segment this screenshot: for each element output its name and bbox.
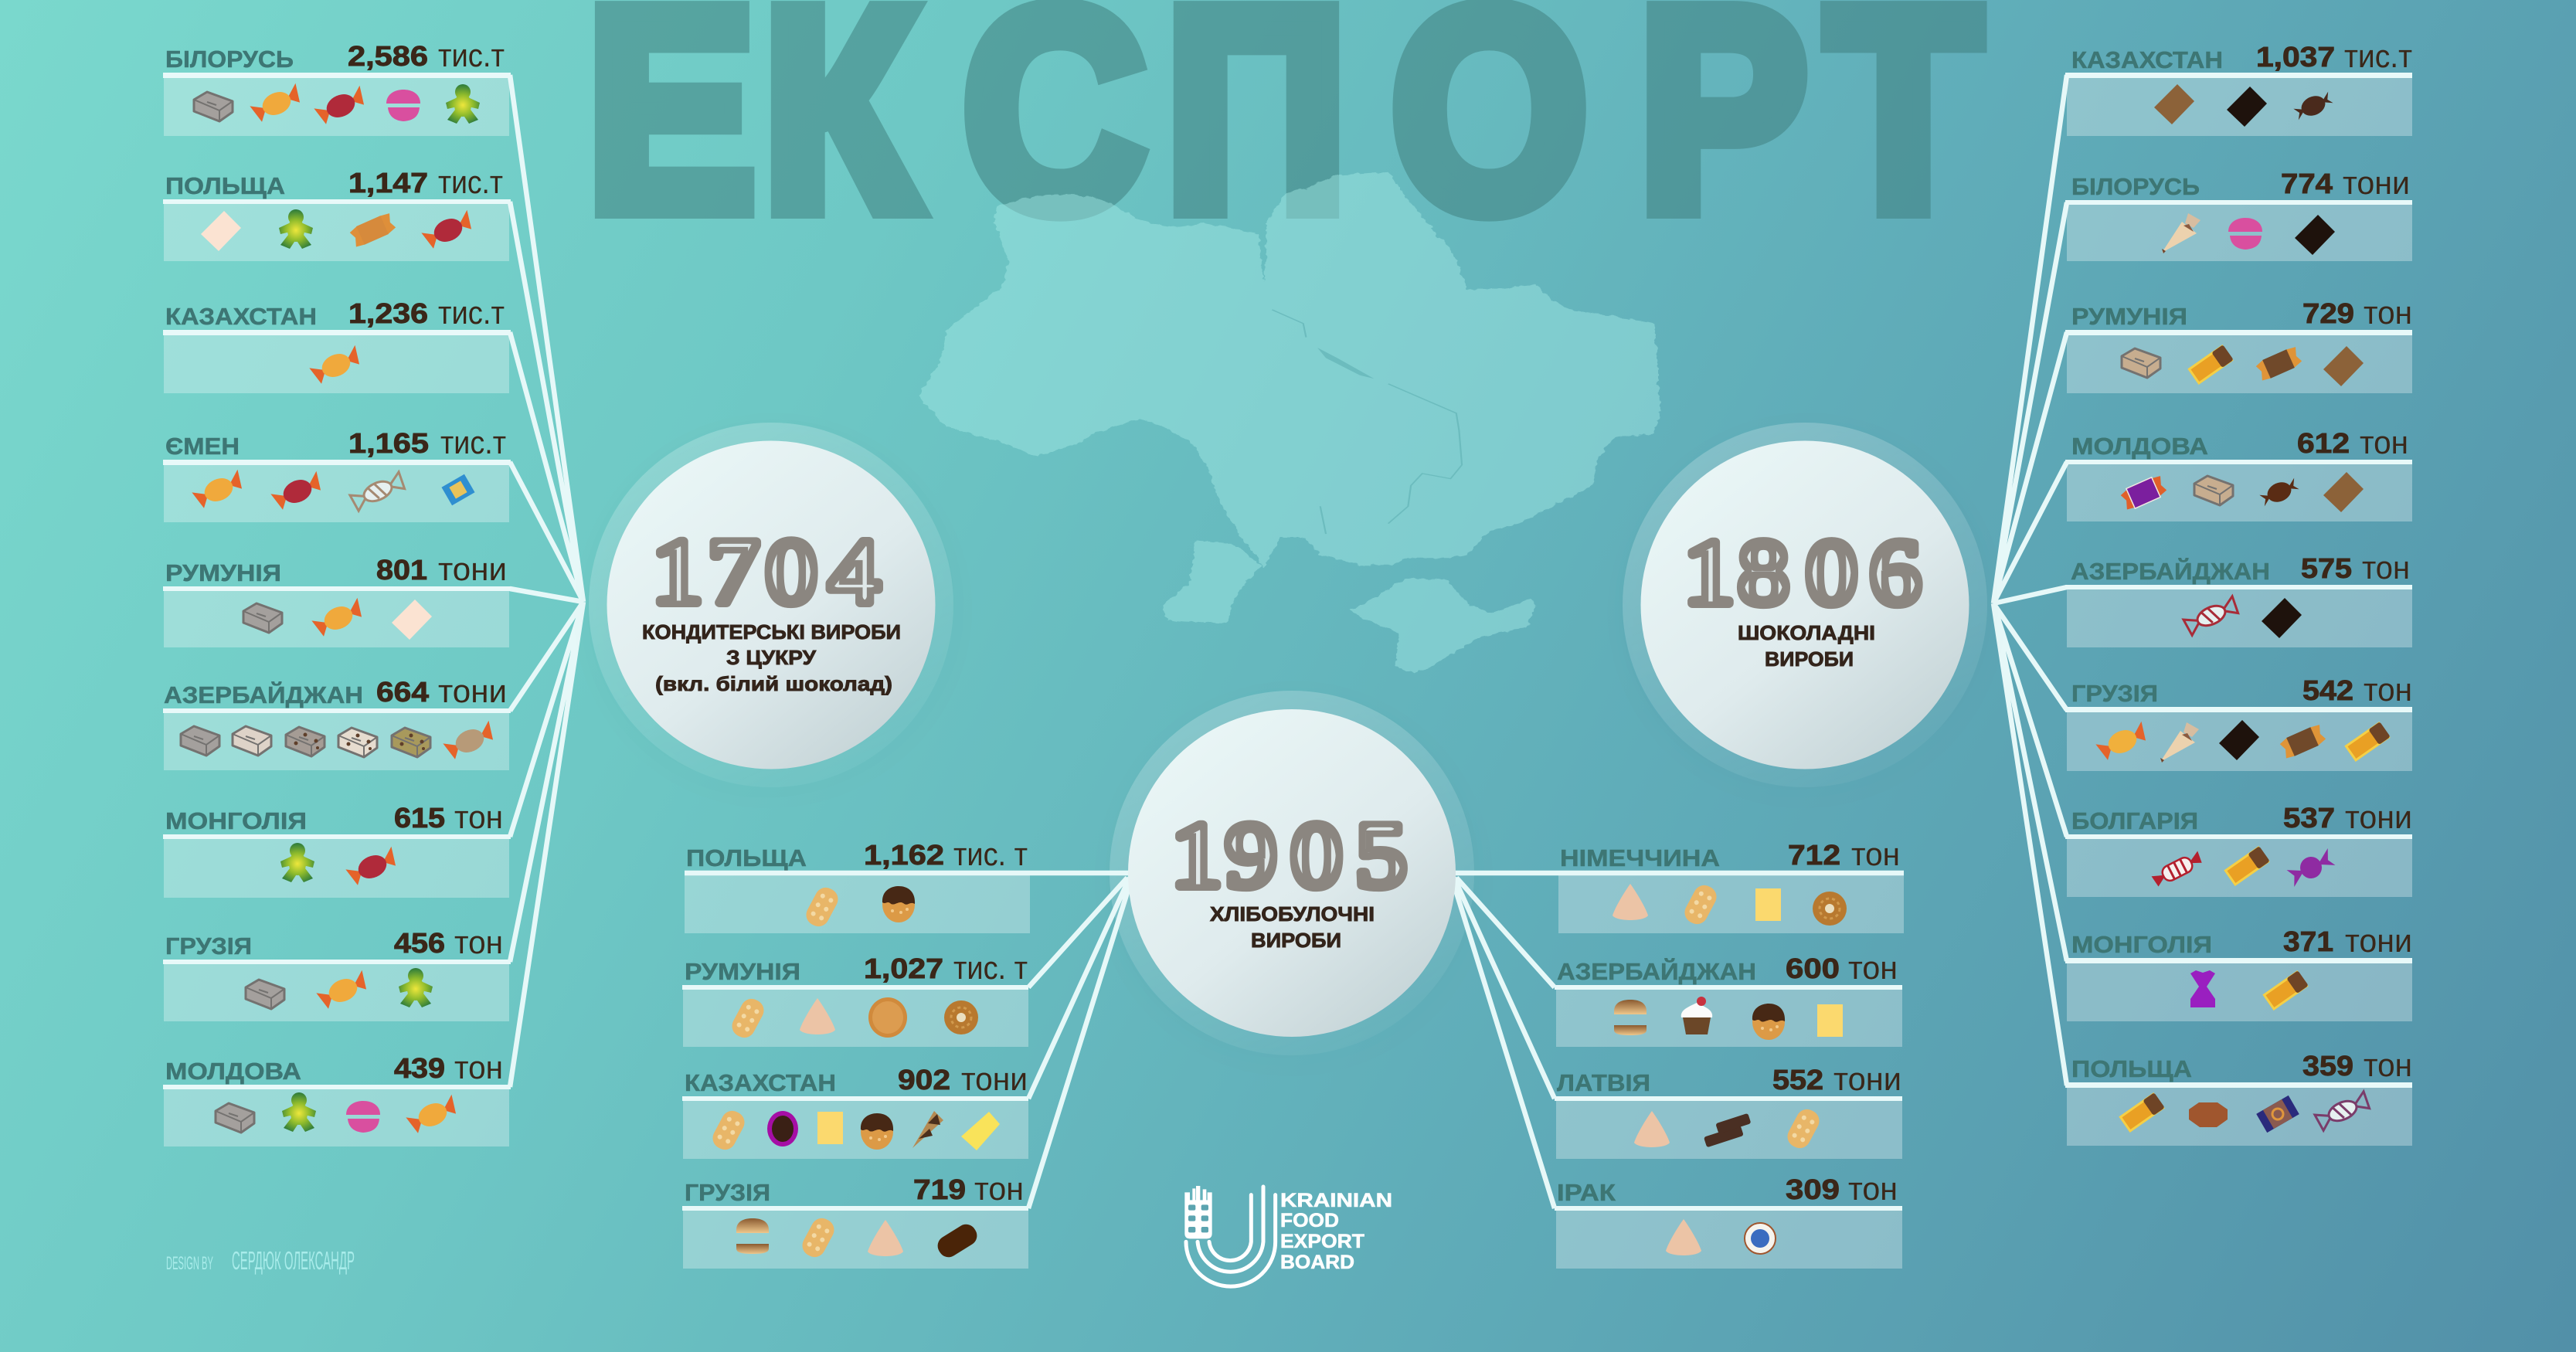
icon: halva <box>246 980 284 1009</box>
icon: striped candy <box>2314 1092 2371 1131</box>
country: МОЛДОВА <box>2071 433 2208 460</box>
row: Білорусь, chocolate <box>2065 165 2412 261</box>
icon: milk chocolate <box>2154 84 2194 124</box>
icon: cone <box>800 998 835 1034</box>
row: Ємен, confectionery <box>163 424 511 522</box>
value: 1,147 <box>348 167 428 199</box>
value: 552 <box>1772 1064 1823 1096</box>
value: 729 <box>2302 297 2354 329</box>
country: БОЛГАРІЯ <box>2071 807 2198 834</box>
label <box>642 620 901 695</box>
icon: bar <box>2120 1092 2165 1132</box>
icon: white candy <box>201 211 241 251</box>
icon: yellow cake <box>1755 888 1781 921</box>
label <box>1738 621 1875 671</box>
icon: octagon chocolate <box>2189 1102 2228 1127</box>
country: ГРУЗІЯ <box>165 932 252 960</box>
panel <box>683 985 1028 1047</box>
value: 359 <box>2302 1050 2353 1082</box>
unit: тон <box>1851 836 1900 872</box>
logo mark <box>1184 1186 1276 1286</box>
icon: roll <box>799 1214 838 1261</box>
icon: halva <box>194 92 233 121</box>
icon: choc halva <box>2122 348 2160 378</box>
icon: red candy <box>420 210 476 250</box>
icon: bar <box>2264 970 2309 1010</box>
value: 1,236 <box>348 297 428 329</box>
logo: Ukrainian Food Export Board <box>1184 1186 1392 1286</box>
value: 1,165 <box>348 427 429 459</box>
value: 2,586 <box>348 40 428 72</box>
icon: vanilla halva <box>233 726 271 756</box>
icon: donut <box>944 1000 978 1034</box>
icon: chocolate candy <box>2292 90 2335 122</box>
icon: caramel <box>2255 345 2303 382</box>
icon: toffee <box>348 212 397 248</box>
circle: chocolate <box>1623 423 1987 787</box>
icon: yellow wafer <box>961 1112 1000 1150</box>
unit: тони <box>438 673 507 709</box>
icon: yellow cake <box>817 1112 843 1144</box>
icon: piping bag <box>2162 213 2200 253</box>
unit: тис.т <box>2344 38 2412 74</box>
unit: тон <box>974 1170 1024 1207</box>
unit: тис.т <box>438 294 505 331</box>
unit: тон <box>2362 549 2410 586</box>
value: 600 <box>1786 953 1840 984</box>
icon: cone <box>1613 884 1648 920</box>
row: Азербайджан, chocolate <box>2065 549 2412 647</box>
icon: bar <box>2225 846 2270 885</box>
icon: striped candy <box>2150 851 2204 888</box>
country: НІМЕЧЧИНА <box>1560 844 1720 871</box>
code 1905: 1905 <box>1171 804 1406 907</box>
icon: orange candy <box>2095 722 2150 762</box>
icon: macaron <box>386 90 420 121</box>
icon: purple donut <box>767 1111 798 1146</box>
panel <box>2067 958 2412 1021</box>
country: БІЛОРУСЬ <box>165 46 294 73</box>
icon: burger <box>736 1218 769 1254</box>
icon: halva <box>243 603 282 633</box>
row: Польща, chocolate <box>2065 1047 2412 1146</box>
panel <box>164 460 509 522</box>
text: СЕРДЮК ОЛЕКСАНДР <box>232 1246 355 1275</box>
unit: тон <box>1848 1170 1898 1207</box>
country: ГРУЗІЯ <box>2071 680 2158 707</box>
label: ВИРОБИ <box>1251 929 1341 952</box>
row: Монголія, confectionery <box>163 799 511 898</box>
icon: wafer <box>912 1111 943 1148</box>
icon: white candy <box>392 600 432 640</box>
unit: тон <box>2364 1047 2412 1083</box>
panel <box>164 330 509 393</box>
unit: тон <box>2364 294 2412 331</box>
icon: gummy <box>446 84 480 124</box>
unit: тони <box>1833 1061 1901 1097</box>
country: ПОЛЬЩА <box>2071 1055 2192 1082</box>
icon: bar <box>2346 722 2391 761</box>
unit: тис.т <box>438 37 505 73</box>
country: ЄМЕН <box>165 433 240 460</box>
icon: gummy <box>282 1092 316 1132</box>
icon: striped candy <box>349 472 406 511</box>
connectors: chocolate <box>1993 75 2067 1085</box>
icon: burger <box>1614 1000 1647 1035</box>
country: МОНГОЛІЯ <box>2071 931 2212 958</box>
row: Монголія, chocolate <box>2065 922 2412 1021</box>
value: 309 <box>1786 1174 1840 1205</box>
icon: red candy <box>345 847 400 887</box>
label: (вкл. білий шоколад) <box>655 672 892 695</box>
icon: glazed muffin <box>861 1113 893 1150</box>
unit: тон <box>454 799 503 835</box>
icon: orange candy <box>405 1095 460 1135</box>
icon: halva <box>216 1103 254 1133</box>
icon: dark chocolate <box>2219 720 2259 760</box>
icon: red candy <box>270 471 325 511</box>
icon: choc halva <box>2194 476 2233 505</box>
country: ГРУЗІЯ <box>685 1179 770 1206</box>
designer credit: DESIGN BY <box>166 1253 213 1274</box>
value: 612 <box>2297 427 2350 459</box>
panel <box>2067 460 2412 521</box>
panel <box>164 199 509 261</box>
icon: vanilla nut halva <box>338 728 377 757</box>
label: КОНДИТЕРСЬКІ ВИРОБИ <box>642 620 901 644</box>
icon: orange candy <box>249 83 304 124</box>
country: КАЗАХСТАН <box>685 1069 836 1096</box>
icon: red candy <box>313 86 369 126</box>
country: КАЗАХСТАН <box>2071 46 2223 73</box>
row: Білорусь, confectionery <box>163 37 511 136</box>
panel <box>2067 585 2412 647</box>
row: Грузія, confectionery <box>163 924 511 1021</box>
logo text <box>1280 1190 1392 1273</box>
country: МОНГОЛІЯ <box>165 807 307 834</box>
country: РУМУНІЯ <box>2071 303 2187 330</box>
value: 371 <box>2283 926 2333 957</box>
row: Грузія, bakery <box>682 1170 1028 1269</box>
country: БІЛОРУСЬ <box>2071 173 2200 200</box>
panel <box>1556 1206 1902 1269</box>
icon: purple toffee <box>2119 474 2168 511</box>
unit: тон <box>454 1049 503 1085</box>
value: 542 <box>2302 674 2353 706</box>
panel <box>685 871 1030 933</box>
icon: macaron <box>2228 218 2262 250</box>
country: АЗЕРБАЙДЖАН <box>164 681 363 708</box>
icon: orange candy <box>315 970 371 1011</box>
value: 439 <box>394 1052 445 1084</box>
panel <box>164 834 509 898</box>
icon: waffle <box>868 997 907 1038</box>
unit: тис. т <box>953 836 1028 872</box>
code 1704: 1704 <box>652 521 879 623</box>
icon: dark chocolate <box>2227 87 2267 127</box>
label: ХЛІБОБУЛОЧНІ <box>1210 902 1375 926</box>
panel <box>683 1206 1028 1269</box>
logo text: FOOD <box>1280 1210 1339 1231</box>
icon: nut halva <box>286 727 325 756</box>
panel <box>164 960 509 1021</box>
icon: bar <box>2189 345 2234 384</box>
unit: тис. т <box>953 949 1028 986</box>
icon: roll <box>1784 1106 1823 1152</box>
unit: тис.т <box>440 424 506 460</box>
logo text: KRAINIAN <box>1280 1190 1392 1211</box>
icon: orange candy <box>191 470 246 510</box>
unit: тони <box>961 1061 1028 1097</box>
icon: macaron <box>346 1101 380 1133</box>
row: Румунія, bakery <box>682 949 1028 1047</box>
label: З ЦУКРУ <box>726 646 817 669</box>
icon: dark chocolate <box>2295 215 2335 255</box>
panel <box>2067 1082 2412 1146</box>
row: Азербайджан, confectionery <box>163 673 511 770</box>
logo text: EXPORT <box>1280 1231 1364 1252</box>
panel <box>164 586 509 647</box>
value: 801 <box>376 554 427 586</box>
value: 902 <box>898 1064 950 1096</box>
panel <box>683 1096 1028 1159</box>
row: Казахстан, chocolate <box>2065 38 2412 136</box>
row: Молдова, chocolate <box>2065 424 2412 521</box>
icon: striped candy <box>2183 596 2240 636</box>
label <box>1210 902 1375 952</box>
circle: bakery <box>685 691 1904 1208</box>
country: АЗЕРБАЙДЖАН <box>2071 557 2270 585</box>
value: 1,162 <box>864 839 944 871</box>
icon: eclair <box>934 1221 980 1261</box>
icon: glazed muffin <box>882 886 915 922</box>
icon: chocolate candy <box>2258 476 2301 508</box>
country: ЛАТВІЯ <box>1557 1069 1650 1096</box>
connectors: bakery <box>685 873 1904 1208</box>
icon: gummy <box>280 843 314 882</box>
icon: blue cookie <box>1745 1223 1776 1254</box>
label: ВИРОБИ <box>1765 647 1854 671</box>
row: Молдова, confectionery <box>163 1049 511 1146</box>
panel <box>1558 871 1904 933</box>
icon: cupcake <box>1681 997 1712 1034</box>
icon: milk chocolate <box>2323 472 2364 512</box>
unit: тони <box>438 551 507 587</box>
map of Ukraine <box>918 172 1660 674</box>
row: Німеччина, bakery <box>1558 836 1904 933</box>
code 1806: 1806 <box>1684 521 1921 624</box>
icon: caramel <box>2279 723 2327 759</box>
icon: blue wrapper <box>441 474 475 505</box>
country: ПОЛЬЩА <box>686 844 807 871</box>
row: Болгарія, chocolate <box>2065 799 2412 897</box>
icon: halva <box>181 726 219 756</box>
unit: тис.т <box>438 164 503 200</box>
panel <box>1556 985 1902 1047</box>
value: 664 <box>376 676 429 708</box>
value: 456 <box>394 927 445 959</box>
value: 575 <box>2301 552 2352 584</box>
icon: gummy <box>399 968 433 1007</box>
value: 1,027 <box>864 953 943 984</box>
value: 719 <box>913 1174 966 1205</box>
icon: roll <box>803 884 841 930</box>
row: Казахстан, confectionery <box>163 294 511 393</box>
icon: orange candy <box>311 598 366 638</box>
icon: wrapper <box>2256 1096 2299 1133</box>
icon: dark sticks <box>1701 1113 1754 1147</box>
icon: piping bag <box>2160 722 2199 763</box>
row: Грузія, chocolate <box>2065 671 2412 771</box>
icon: cone <box>1634 1111 1670 1147</box>
value: 537 <box>2283 802 2335 834</box>
unit: тон <box>2364 671 2412 708</box>
icon: cone <box>868 1220 903 1256</box>
country: РУМУНІЯ <box>685 958 800 985</box>
icon: tan candy <box>442 721 498 761</box>
country: КАЗАХСТАН <box>165 303 317 330</box>
row: Румунія, confectionery <box>163 551 511 647</box>
country: ІРАК <box>1557 1179 1616 1206</box>
row: Ірак, bakery <box>1555 1170 1902 1269</box>
icon: purple bag <box>2190 970 2215 1007</box>
icon: roll <box>1681 882 1720 928</box>
panel <box>2067 834 2412 897</box>
icon: milk chocolate <box>2323 346 2364 386</box>
unit: тони <box>2343 165 2410 201</box>
value: 615 <box>394 802 445 834</box>
row: Польща, bakery <box>685 836 1030 933</box>
panel <box>164 73 509 136</box>
row: Польща, confectionery <box>163 164 511 261</box>
row: Румунія, chocolate <box>2065 294 2412 393</box>
panel <box>2067 200 2412 261</box>
designer credit <box>166 1246 355 1275</box>
icon: sesame halva <box>392 728 430 757</box>
value: 1,037 <box>2256 41 2335 73</box>
panel <box>2067 73 2412 136</box>
icon: roll <box>729 995 767 1041</box>
country: ПОЛЬЩА <box>165 172 285 199</box>
logo text: BOARD <box>1280 1252 1354 1273</box>
unit: тони <box>2345 799 2412 835</box>
unit: тони <box>2345 922 2412 959</box>
icon: orange candy <box>308 345 364 386</box>
country: АЗЕРБАЙДЖАН <box>1557 957 1756 985</box>
row: Латвія, bakery <box>1555 1061 1902 1159</box>
icon: donut <box>1813 892 1847 926</box>
circle: confectionery <box>589 423 953 787</box>
value: 712 <box>1788 839 1840 871</box>
panel <box>2067 707 2412 771</box>
country: МОЛДОВА <box>165 1058 301 1085</box>
row: Казахстан, bakery <box>682 1061 1028 1159</box>
panel <box>1556 1096 1902 1159</box>
icon: roll <box>709 1107 748 1153</box>
value: 774 <box>2281 168 2333 199</box>
icon: glazed muffin <box>1752 1004 1785 1040</box>
icon: purple candy <box>2285 848 2336 887</box>
country: РУМУНІЯ <box>165 559 281 586</box>
panel <box>2067 330 2412 393</box>
label: ШОКОЛАДНІ <box>1738 621 1875 644</box>
row: Азербайджан, bakery <box>1555 949 1902 1047</box>
icon: dark chocolate <box>2262 598 2302 638</box>
icon: cone <box>1666 1219 1701 1255</box>
unit: тон <box>1848 949 1898 986</box>
connectors: confectionery <box>510 75 583 1087</box>
icon: gummy <box>279 209 313 249</box>
panel <box>164 1085 509 1146</box>
unit: тон <box>454 924 503 960</box>
unit: тон <box>2360 424 2408 460</box>
icon: yellow cake <box>1817 1004 1843 1037</box>
panel <box>164 708 509 770</box>
